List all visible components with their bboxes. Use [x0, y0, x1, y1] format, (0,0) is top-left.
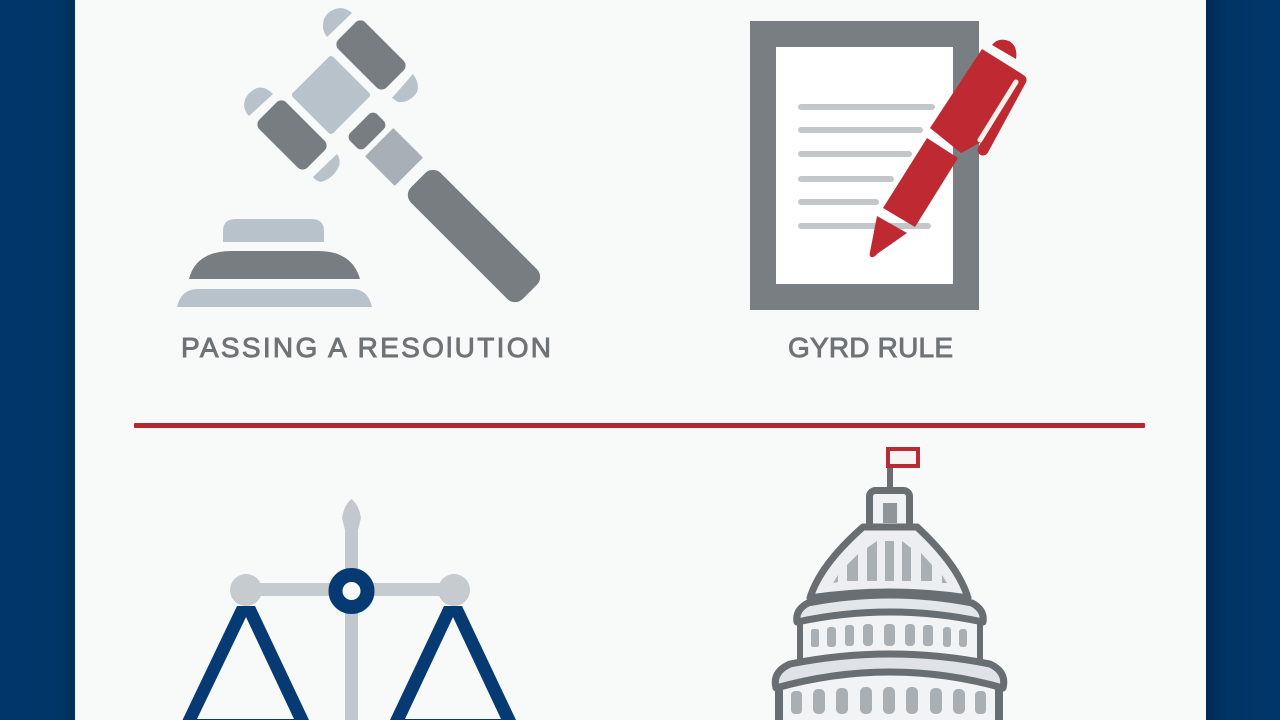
gavel end caps [244, 8, 418, 182]
pen clip [983, 80, 1021, 150]
upper cornice band [797, 595, 983, 622]
right pan triangle [390, 606, 516, 720]
pen clip highlight [980, 82, 1016, 140]
label: passing a resolution: PASSING A RESOlUTION [181, 332, 551, 363]
lower drum [779, 665, 999, 720]
lower drum walls [775, 684, 1003, 720]
gavel collar dark [346, 110, 388, 152]
upper drum [800, 610, 980, 660]
divider [134, 423, 1145, 428]
dome [810, 527, 968, 598]
right beam knob [438, 574, 470, 606]
sound block top [223, 219, 324, 242]
icon: document and pen [750, 21, 1024, 310]
label: byrd rule: GYRD RULE [788, 332, 953, 363]
pivot ring [336, 575, 368, 607]
left beam knob [230, 574, 262, 606]
upper drum walls [797, 618, 983, 664]
document text lines [798, 104, 935, 229]
icon: capitol dome [775, 449, 1004, 720]
pen lower barrel [883, 138, 958, 227]
gavel head center [291, 55, 371, 135]
scale beam [246, 583, 454, 596]
pen tip [870, 216, 907, 257]
lantern [870, 490, 910, 528]
gavel head lower block [255, 98, 329, 172]
icon: gavel [177, 8, 545, 307]
flag [888, 449, 918, 466]
scale post [342, 499, 361, 720]
pen cap [992, 40, 1016, 59]
document frame [750, 21, 979, 310]
lower drum windows [791, 687, 986, 714]
gavel handle [403, 165, 545, 307]
dome ribs [833, 541, 947, 583]
flag pole [887, 449, 893, 489]
gavel head upper block [334, 18, 408, 92]
sound block middle [189, 251, 360, 279]
gavel collar light [365, 128, 423, 186]
icon: scales of justice [182, 499, 516, 720]
lantern window [883, 503, 897, 523]
upper drum windows [811, 624, 967, 647]
document page [776, 47, 953, 284]
left pan triangle [182, 606, 309, 720]
pen [870, 40, 1024, 257]
pen upper barrel [930, 49, 1024, 153]
sound block base [177, 289, 372, 307]
lower cornice band [775, 654, 1004, 688]
